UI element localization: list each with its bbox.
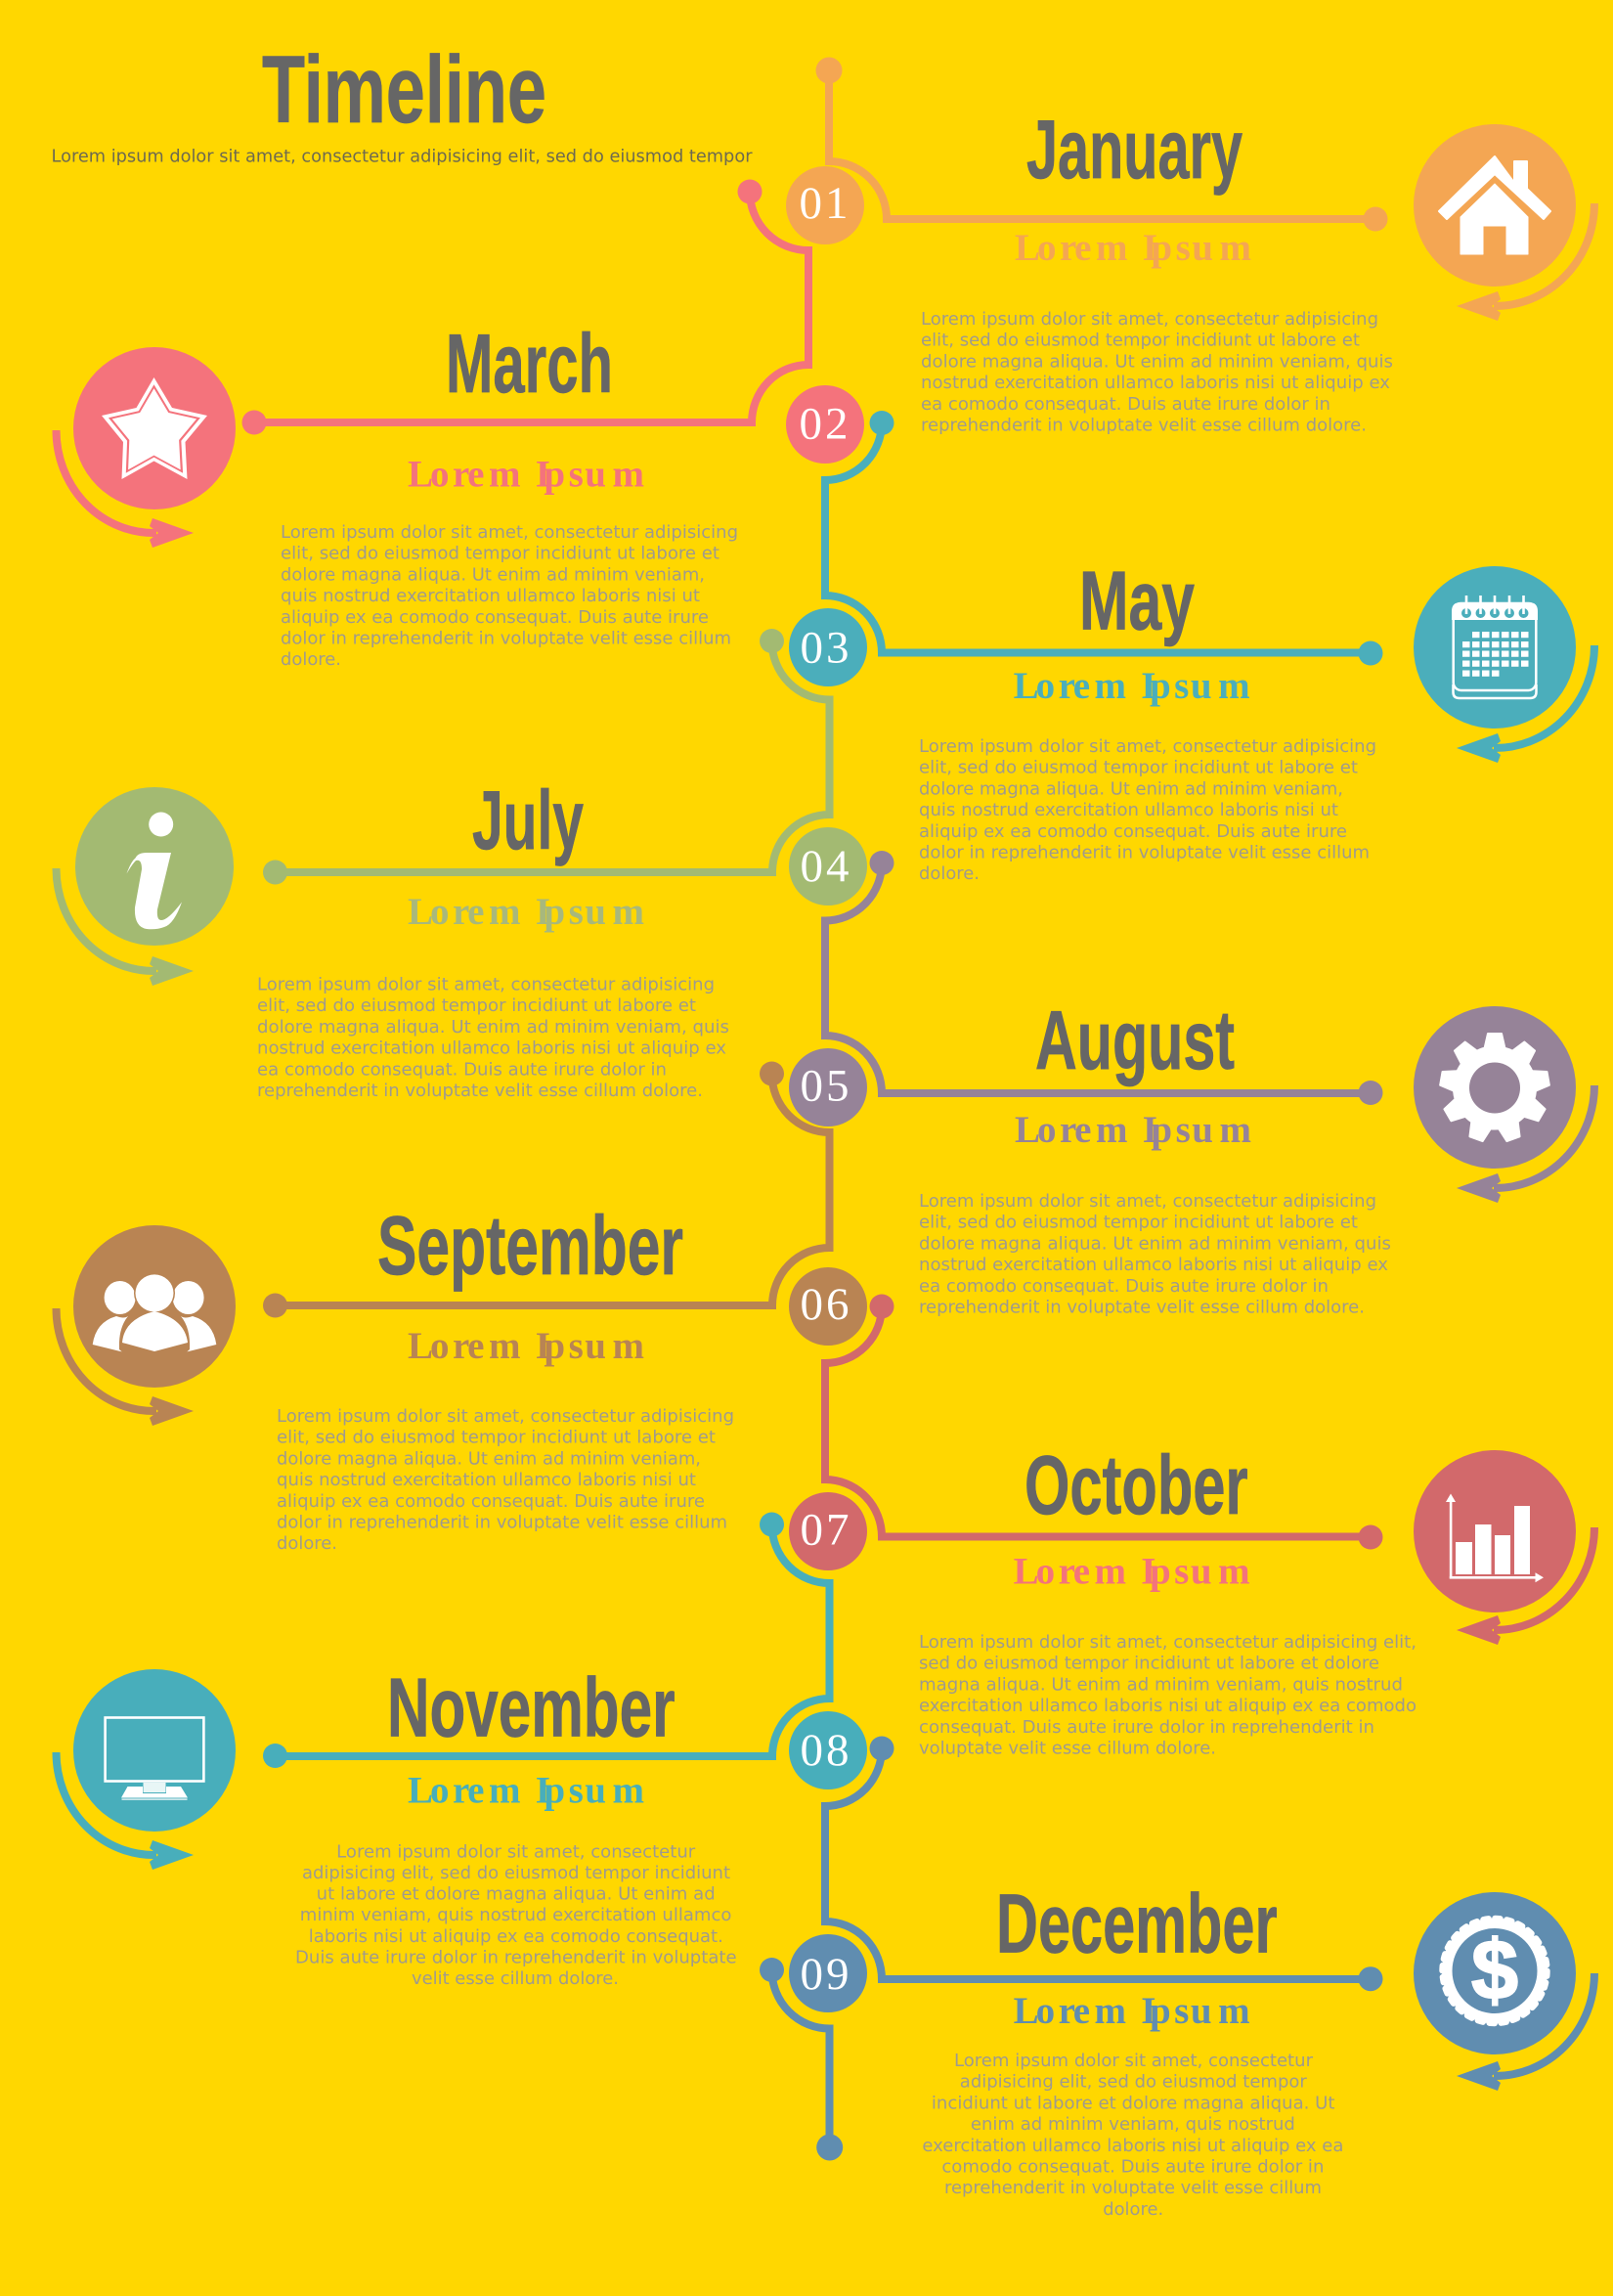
body text: dolore magna aliqua. Ut enim ad minim veniam, quis [919, 1233, 1391, 1254]
body text: Lorem ipsum dolor sit amet, consectetur adipisicing [281, 522, 738, 543]
number badge 04: 04 [800, 841, 852, 892]
body text: dolore magna aliqua. Ut enim ad minim veniam, [277, 1448, 701, 1469]
body text: exercitation ullamco laboris nisi ut aliquip ex ea comodo [919, 1696, 1417, 1716]
number badge 01 [786, 166, 864, 244]
connector 08 [263, 1512, 829, 1768]
body text: aliquip ex ea comodo consequat. Duis aute irure [277, 1491, 705, 1512]
connector 04 [263, 629, 829, 884]
arrow [1457, 1085, 1594, 1203]
icon: info [75, 787, 234, 946]
body text: Lorem ipsum dolor sit amet, consectetur adipisicing [919, 1191, 1376, 1212]
body text: Lorem ipsum dolor sit amet, consectetur adipisicing [921, 309, 1378, 330]
subheading: Lorem Ipsum [408, 1325, 644, 1367]
body text: dolor in reprehenderit in voluptate velit esse cillum [919, 843, 1370, 862]
number badge 06: 06 [800, 1279, 852, 1330]
number badge 06 [789, 1267, 867, 1346]
heading July: July [472, 774, 584, 867]
heading March: March [446, 318, 613, 411]
number badge 05: 05 [800, 1060, 852, 1111]
panel: March [56, 180, 864, 670]
body text: magna aliqua. Ut enim ad minim veniam, quis nostrud [919, 1674, 1403, 1695]
connector 02 [242, 180, 808, 434]
body text: quis nostrud exercitation ullamco laboris nisi ut [277, 1470, 696, 1490]
body text: elit, sed do eiusmod tempor incidiunt ut labore et [257, 995, 696, 1016]
body text: aliquip ex ea comodo consequat. Duis aute irure [281, 607, 709, 628]
title block [51, 36, 753, 166]
heading August: August [1035, 994, 1235, 1087]
body text: reprehenderit in voluptate velit esse cillum dolore. [919, 1297, 1365, 1318]
body text: Lorem ipsum dolor sit amet, consectetur adipisicing elit, [919, 1632, 1417, 1653]
number badge 02: 02 [800, 399, 850, 450]
connector 09 [760, 1737, 1382, 2161]
arrow [56, 868, 194, 986]
body text: elit, sed do eiusmod tempor incidiunt ut labore et [281, 544, 719, 564]
body text: dolore. [1103, 2199, 1163, 2220]
number badge 05 [789, 1048, 867, 1126]
body text: reprehenderit in voluptate velit esse cillum [944, 2178, 1322, 2198]
body text: enim ad minim veniam, quis nostrud [971, 2114, 1295, 2135]
connector 07 [825, 1295, 1382, 1549]
number badge 02 [786, 385, 864, 464]
body text: Lorem ipsum dolor sit amet, consectetur [336, 1841, 696, 1862]
heading January: January [1026, 104, 1242, 197]
body text: comodo consequat. Duis aute irure dolor in [941, 2157, 1324, 2177]
heading September: September [377, 1200, 683, 1293]
body text: quis nostrud exercitation ullamco laboris nisi ut [919, 800, 1338, 820]
arrow [56, 1752, 194, 1870]
heading December: December [996, 1878, 1278, 1971]
connector 01 [815, 57, 1388, 231]
body text: elit, sed do eiusmod tempor incidiunt ut labore et [921, 331, 1360, 351]
subheading: Lorem Ipsum [1015, 1109, 1251, 1151]
arrow [1457, 1527, 1594, 1645]
subheading: Lorem Ipsum [1015, 227, 1251, 269]
panel: July [56, 629, 867, 1101]
subheading: Lorem Ipsum [1014, 1990, 1250, 2032]
icon: calendar [1414, 566, 1576, 729]
arrow [1457, 645, 1594, 763]
body text: Lorem ipsum dolor sit amet, consectetur adipisicing [277, 1406, 734, 1427]
panel: August [789, 851, 1594, 1318]
number badge 07: 07 [800, 1505, 852, 1556]
panel: May [789, 411, 1594, 884]
arrow [1457, 203, 1594, 321]
body text: quis nostrud exercitation ullamco laboris nisi ut [281, 586, 700, 606]
body text: Lorem ipsum dolor sit amet, consectetur adipisicing [257, 974, 715, 995]
icon: gear [1414, 1006, 1576, 1169]
icon: bar chart [1414, 1450, 1576, 1612]
subheading: Lorem Ipsum [408, 454, 644, 495]
body text: ea comodo consequat. Duis aute irure dolor in [921, 394, 1330, 415]
arrow [1457, 1973, 1594, 2091]
panel: January [786, 57, 1594, 436]
body text: consequat. Duis aute irure dolor in reprehenderit in [919, 1717, 1374, 1738]
body text: elit, sed do eiusmod tempor incidiunt ut labore et [919, 758, 1358, 778]
number badge 09 [789, 1934, 867, 2012]
panel: October [789, 1295, 1594, 1758]
subheading: Lorem Ipsum [1014, 665, 1250, 707]
arrow [56, 430, 194, 548]
body text: elit, sed do eiusmod tempor incidiunt ut labore et [919, 1213, 1358, 1233]
number badge 08 [789, 1711, 867, 1789]
body text [919, 736, 1376, 884]
body text: reprehenderit in voluptate velit esse cillum dolore. [921, 415, 1367, 436]
body text [919, 1632, 1417, 1758]
body text: Lorem ipsum dolor sit amet, consectetur adipisicing [919, 736, 1376, 757]
body text [281, 522, 738, 670]
body text: incidiunt ut labore et dolore magna aliqua. Ut [932, 2093, 1335, 2113]
body text: aliquip ex ea comodo consequat. Duis aute irure [919, 821, 1347, 842]
body text: elit, sed do eiusmod tempor incidiunt ut labore et [277, 1428, 716, 1448]
body text [919, 1191, 1391, 1318]
icon: computer monitor [73, 1669, 236, 1832]
body text: dolore. [281, 649, 341, 670]
title: Timeline [262, 36, 546, 143]
number badge 08: 08 [800, 1725, 852, 1776]
body text [922, 2051, 1343, 2220]
connector 05 [825, 851, 1382, 1105]
number badge 04 [789, 827, 867, 905]
body text: dolore. [277, 1533, 337, 1554]
connector 06 [263, 1062, 829, 1318]
body text: dolore magna aliqua. Ut enim ad minim veniam, [919, 778, 1343, 799]
number badge 03: 03 [800, 622, 852, 673]
heading November: November [387, 1662, 675, 1754]
body text: reprehenderit in voluptate velit esse cillum dolore. [257, 1081, 703, 1101]
icon: people [73, 1225, 236, 1388]
body text: minim veniam, quis nostrud exercitation ullamco [300, 1905, 731, 1925]
subheading: Lorem Ipsum [1014, 1551, 1250, 1593]
body text: dolor in reprehenderit in voluptate velit esse cillum [277, 1512, 727, 1533]
body text: sed do eiusmod tempor incidiunt ut labore et dolore [919, 1654, 1379, 1674]
body text [257, 974, 729, 1101]
body text: nostrud exercitation ullamco laboris nisi ut aliquip ex [919, 1255, 1388, 1275]
body text: dolore magna aliqua. Ut enim ad minim veniam, quis [257, 1017, 729, 1038]
body text [277, 1406, 734, 1554]
body text: laboris nisi ut aliquip ex ea comodo consequat. [309, 1926, 723, 1947]
body text: dolore. [919, 863, 980, 884]
body text: velit esse cillum dolore. [412, 1968, 619, 1989]
panel: September [56, 1062, 867, 1554]
arrow [56, 1308, 194, 1426]
body text [921, 309, 1393, 436]
icon: dollar coin [1414, 1892, 1576, 2054]
subheading: Lorem Ipsum [408, 1770, 644, 1812]
number badge 03 [789, 608, 867, 686]
body text: ea comodo consequat. Duis aute irure dolor in [257, 1059, 667, 1080]
body text: ut labore et dolore magna aliqua. Ut enim ad [317, 1884, 716, 1905]
body text: ea comodo consequat. Duis aute irure dolor in [919, 1276, 1329, 1297]
body text: exercitation ullamco laboris nisi ut aliquip ex ea [922, 2136, 1343, 2156]
body text: Duis aute irure dolor in reprehenderit in voluptate [295, 1947, 737, 1967]
panel: November [56, 1512, 867, 1989]
number badge 09: 09 [800, 1949, 852, 2000]
heading October: October [1024, 1439, 1248, 1532]
body text [295, 1841, 737, 1989]
body text: adipisicing elit, sed do eiusmod tempor incidiunt [302, 1863, 730, 1883]
body text: adipisicing elit, sed do eiusmod tempor [960, 2072, 1307, 2093]
body text: voluptate velit esse cillum dolore. [919, 1739, 1216, 1758]
icon: house [1414, 124, 1576, 287]
number badge 07 [789, 1492, 867, 1570]
icon: star [73, 347, 236, 509]
body text: dolore magna aliqua. Ut enim ad minim veniam, [281, 564, 705, 585]
panel: December [760, 1737, 1594, 2220]
body text: dolor in reprehenderit in voluptate velit esse cillum [281, 628, 731, 649]
heading May: May [1079, 555, 1195, 648]
subtitle: Lorem ipsum dolor sit amet, consectetur adipisicing elit, sed do eiusmod tempor [51, 147, 753, 166]
icon: dollar coin: $ [1471, 1923, 1518, 2017]
body text: Lorem ipsum dolor sit amet, consectetur [954, 2051, 1314, 2071]
body text: nostrud exercitation ullamco laboris nisi ut aliquip ex [257, 1038, 726, 1059]
subheading: Lorem Ipsum [408, 891, 644, 933]
number badge 01: 01 [800, 178, 850, 229]
body text: dolore magna aliqua. Ut enim ad minim veniam, quis [921, 351, 1393, 372]
body text: nostrud exercitation ullamco laboris nisi ut aliquip ex [921, 373, 1390, 393]
connector 03 [825, 411, 1382, 665]
